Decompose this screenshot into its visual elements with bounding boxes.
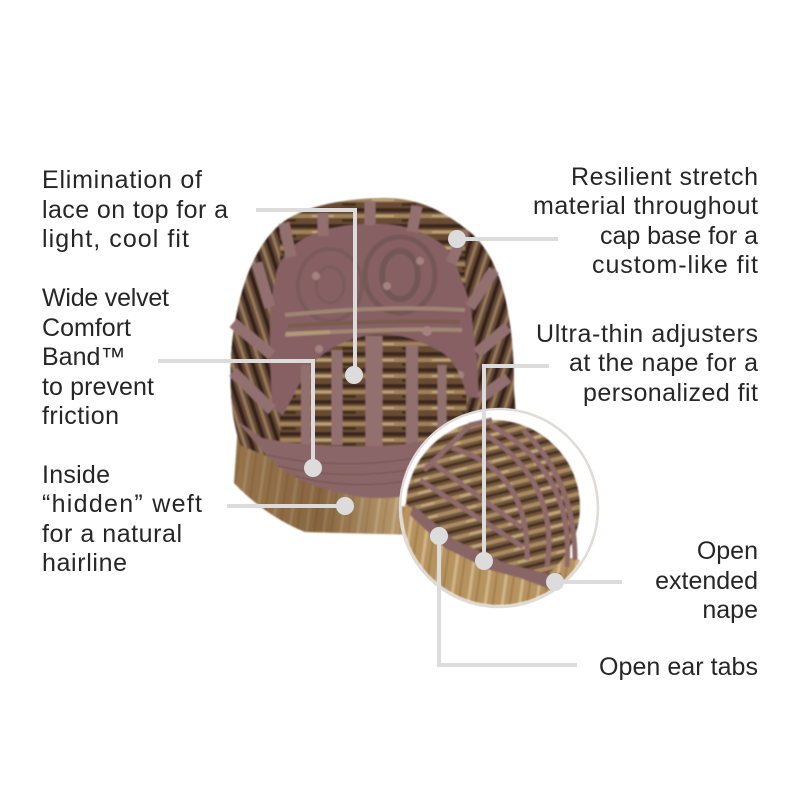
text: open extended nape [655,537,758,624]
lace openings [285,237,465,335]
inset nape band [410,505,562,590]
text: hidden weft: Inside [42,461,110,489]
lace dots [312,257,464,379]
inset background [400,409,598,607]
text: ultra-thin adjusters: at the nape for a [569,349,758,377]
text: ultra-thin adjusters [536,320,758,407]
text: elimination of lace [42,166,228,253]
cap weft stripes [229,197,517,456]
callout leader: stretch material [448,230,558,248]
inset hair [401,505,581,606]
vertical crown ribs [306,336,442,447]
comfort band [236,420,450,498]
inset: side view circle [400,409,598,620]
text: open extended nape: extended [655,567,758,595]
text: elimination of lace: Elimination of [42,166,202,194]
text: elimination of lace: light, cool fit [42,225,189,253]
text: comfort band [42,284,169,430]
photo: wig cap interior [220,190,525,535]
crown weft window [283,334,467,445]
text: hidden weft [42,461,202,577]
text: open ear tabs: Open ear tabs [599,653,758,681]
text: resilient stretch: Resilient stretch [571,163,758,191]
callout leader: open nape [546,573,622,591]
text: resilient stretch: custom-like fit [592,251,758,279]
hair below cap [234,425,430,535]
text: hidden weft: for a natural [42,520,182,548]
text: comfort band: friction [42,402,119,430]
text: resilient stretch: material throughout [533,192,758,220]
text: hidden weft: hairline [42,549,127,577]
text: elimination of lace: lace on top for a [42,196,228,224]
callout leader: hidden weft [227,497,354,515]
callout leader: ear tabs [430,527,577,665]
inset hair overlap [404,502,534,606]
lace top and crown band [270,224,479,415]
inset ribs [420,420,575,567]
callout leader: lace elimination [256,210,363,384]
text: comfort band: Comfort [42,314,131,342]
text: comfort band: Wide velvet [42,284,169,312]
text: resilient stretch: cap base for a [600,222,758,250]
callout leader: comfort band [158,361,322,477]
text: comfort band: to prevent [42,373,154,401]
text: open extended nape: nape [702,596,758,624]
text: open extended nape: Open [697,537,758,565]
inset wefts [405,419,581,574]
text: ultra-thin adjusters: Ultra-thin adjusters [536,320,758,348]
text: comfort band: Band™ [42,343,125,371]
text: ultra-thin adjusters: personalized fit [583,379,758,407]
text: hidden weft: “hidden” weft [42,490,202,518]
callout leader: ultra-thin adjusters [475,366,549,570]
text: resilient stretch [533,163,758,279]
top and side ribs [233,201,508,410]
